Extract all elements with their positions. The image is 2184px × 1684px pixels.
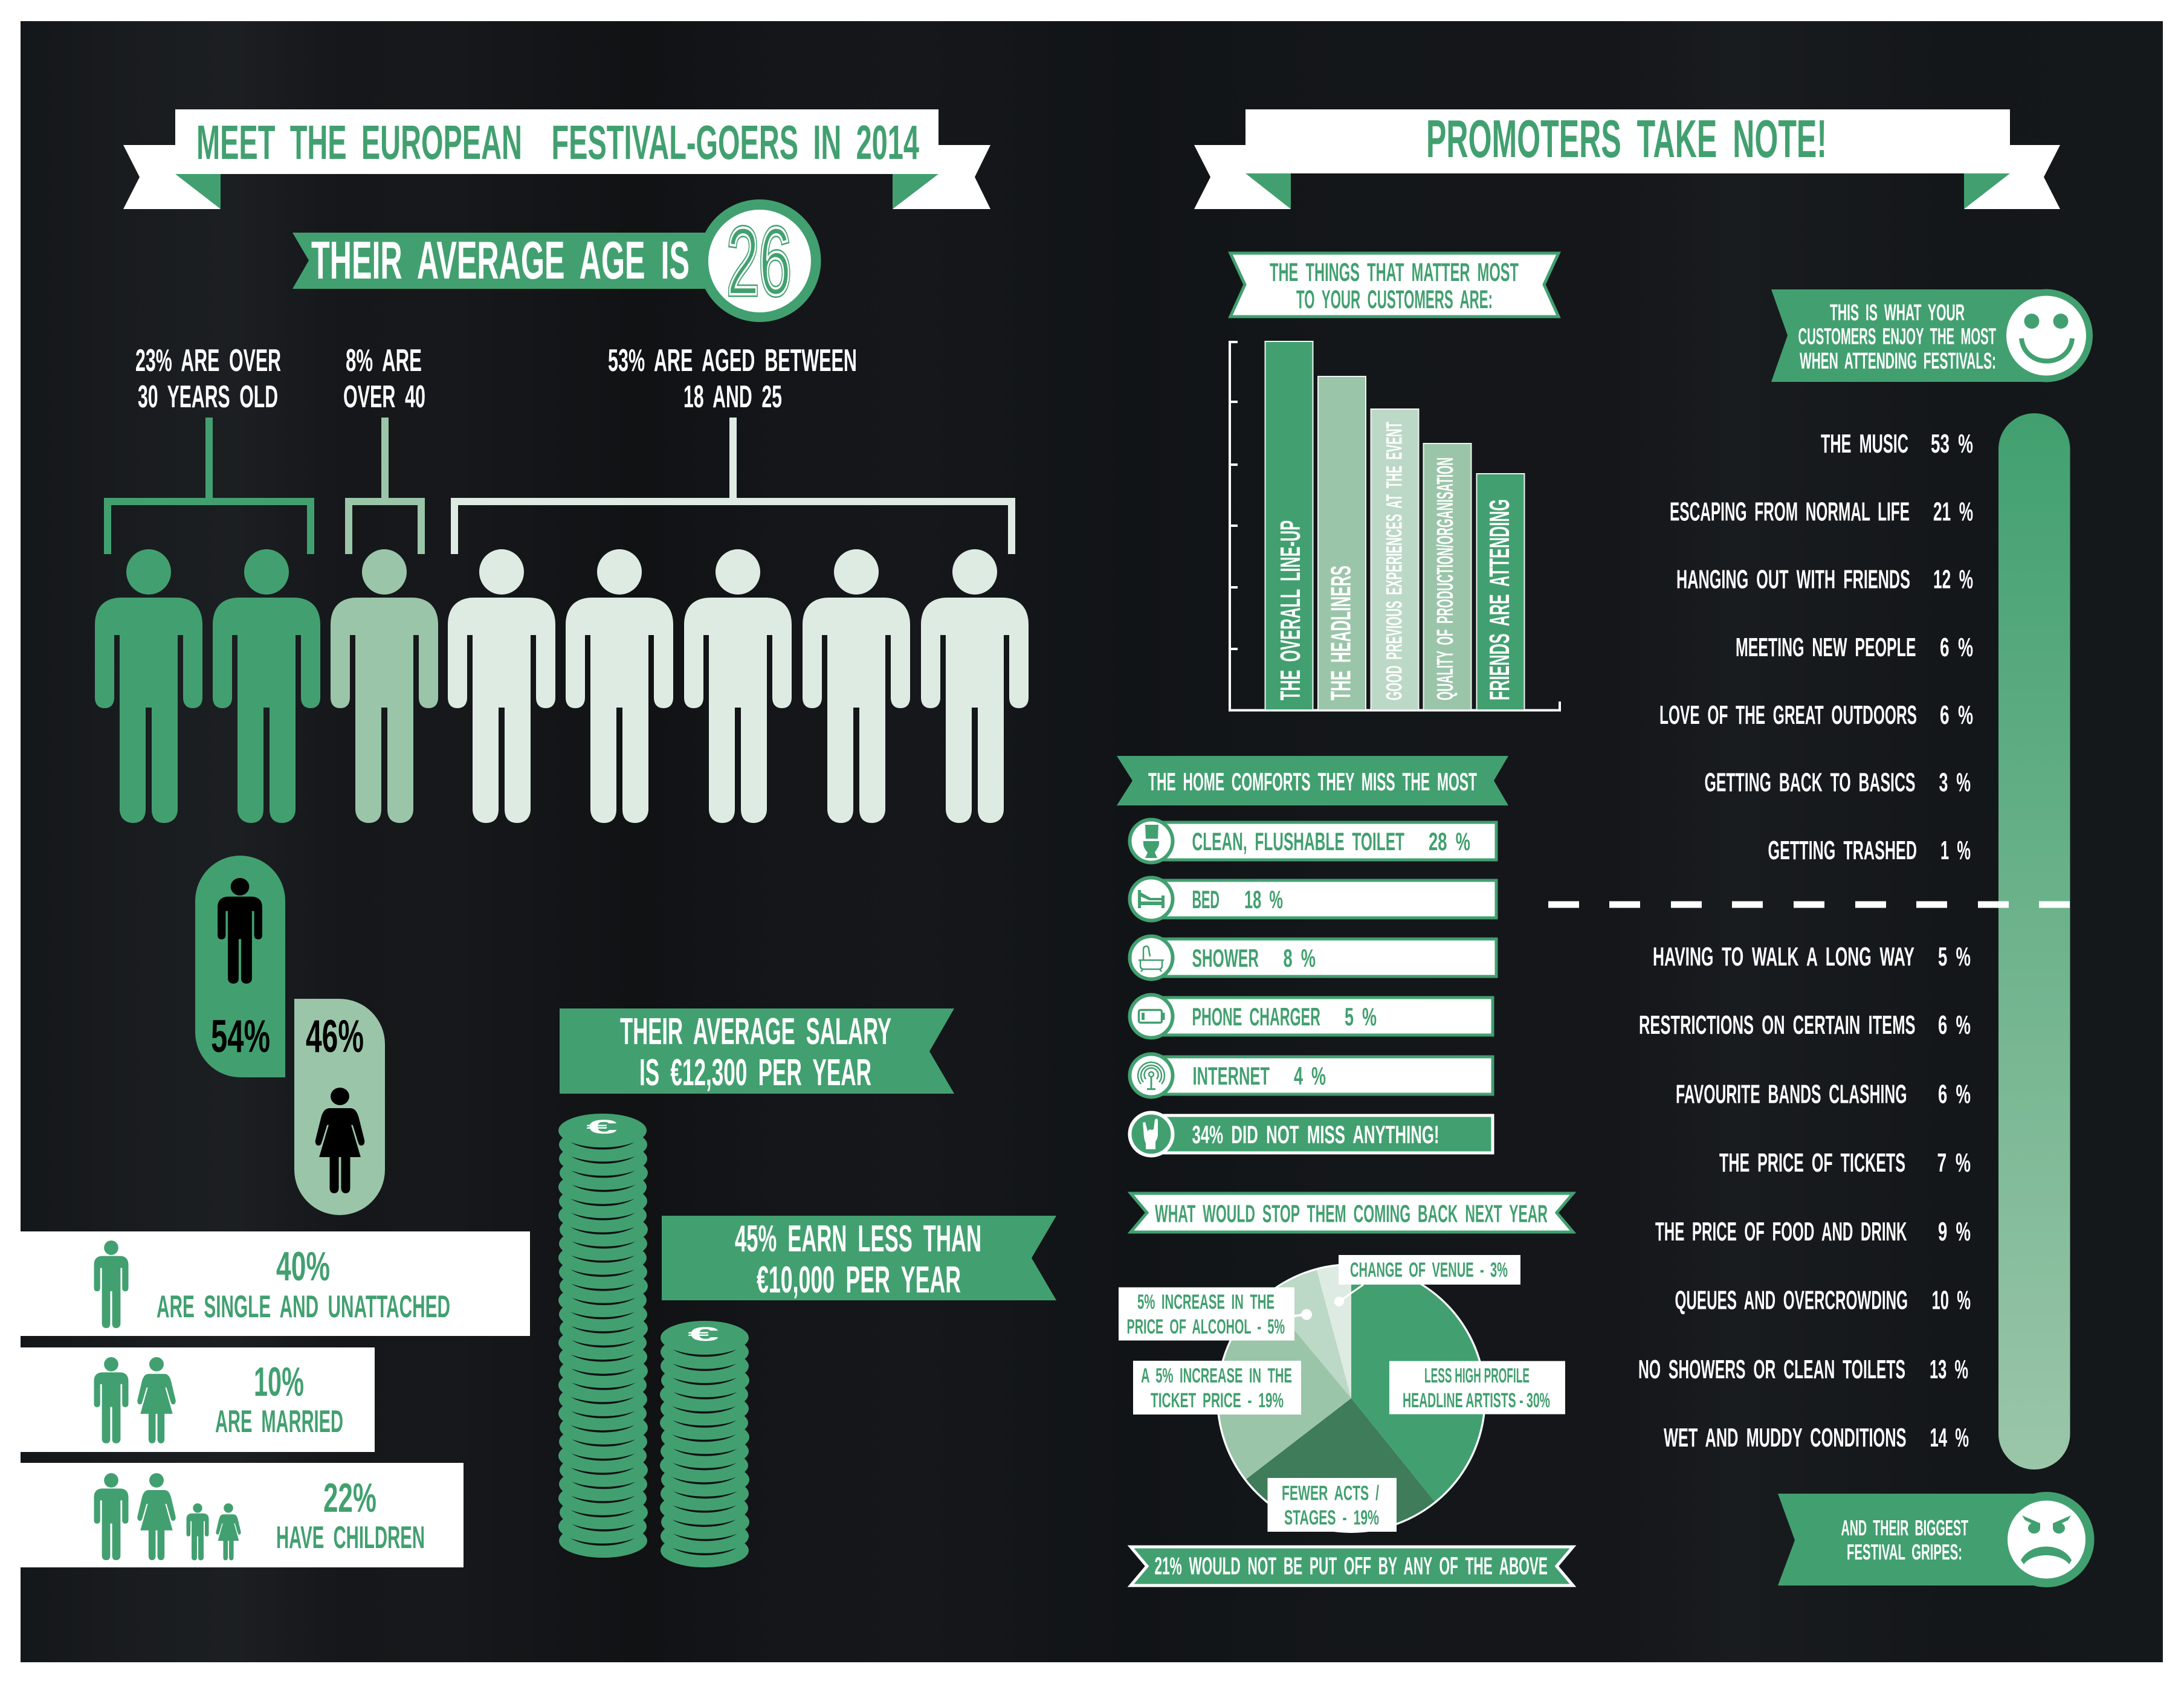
- row: phone charger: PHONE CHARGER: [1192, 1002, 1320, 1031]
- ribbon: home comforts: [1117, 756, 1508, 805]
- title ribbon: promoters take note: PROMOTERS TAKE NOTE!: [1426, 109, 1827, 169]
- list: biggest gripes: QUEUES AND OVERCROWDING: [1675, 1286, 1908, 1315]
- coin stack: tall: [558, 1114, 648, 1560]
- bar: good previous experiences: [1371, 409, 1419, 710]
- row: shower: [1130, 937, 1496, 979]
- list: what customers enjoy: 6 %: [1940, 633, 1973, 662]
- row: did not miss anything: [1130, 1113, 1493, 1155]
- list: what customers enjoy: MEETING NEW PEOPLE: [1736, 633, 1916, 662]
- row: phone charger: 5 %: [1345, 1002, 1377, 1031]
- icon: smiley face: [2006, 296, 2086, 376]
- ribbon: things that matter most: [1230, 253, 1559, 317]
- panel: 10% married: 10%: [254, 1359, 304, 1405]
- callout connector: alcohol: [1294, 1314, 1307, 1316]
- row: toilet: CLEAN, FLUSHABLE TOILET: [1192, 827, 1404, 856]
- age label: 53% aged 18 to 25: [608, 343, 857, 415]
- callout connector: venue: [1339, 1285, 1363, 1302]
- coin stack: tall: €: [586, 1116, 618, 1138]
- ribbon: what would stop them: WHAT WOULD STOP THEM COMING BACK NEXT YEAR: [1155, 1200, 1548, 1228]
- pie label: alcohol price: [1119, 1287, 1294, 1340]
- pie label: headline artists: LESS HIGH PROFILE: [1424, 1364, 1530, 1387]
- ribbon: 21% not put off: 21% WOULD NOT BE PUT OFF BY ANY OF THE ABOVE: [1154, 1552, 1548, 1579]
- list: what customers enjoy: LOVE OF THE GREAT OUTDOORS: [1659, 700, 1917, 730]
- list: biggest gripes: [1638, 942, 1971, 1453]
- list: what customers enjoy: 6 %: [1940, 700, 1973, 730]
- row: shower: 8 %: [1284, 944, 1316, 972]
- list: biggest gripes: 10 %: [1931, 1286, 1971, 1315]
- list: what customers enjoy: GETTING TRASHED: [1768, 836, 1917, 865]
- bar: good previous experiences: GOOD PREVIOUS EXPERIENCES AT THE EVENT: [1381, 422, 1407, 700]
- list: biggest gripes: NO SHOWERS OR CLEAN TOILETS: [1638, 1355, 1905, 1384]
- pie label: ticket price: TICKET PRICE - 19%: [1151, 1389, 1284, 1412]
- list: biggest gripes: 13 %: [1930, 1355, 1968, 1384]
- row: phone charger: [1130, 995, 1493, 1038]
- list: what customers enjoy: 21 %: [1933, 497, 1973, 527]
- list: what customers enjoy: THE MUSIC: [1821, 429, 1908, 459]
- icon: wifi mast: [1138, 1062, 1165, 1089]
- list: biggest gripes: RESTRICTIONS ON CERTAIN ITEMS: [1639, 1010, 1916, 1040]
- row: bed: 18 %: [1244, 885, 1283, 914]
- gradient scale bar: [1998, 413, 2070, 1469]
- coin stack: short: [660, 1321, 749, 1570]
- bracket: over 40: [349, 418, 421, 554]
- list: biggest gripes: HAVING TO WALK A LONG WAY: [1653, 942, 1914, 972]
- dashed divider: [1548, 902, 2070, 908]
- callout dot: venue: [1334, 1297, 1344, 1306]
- pie label: alcohol price: PRICE OF ALCOHOL - 5%: [1126, 1315, 1285, 1338]
- bar: friends attending: FRIENDS ARE ATTENDING: [1484, 499, 1515, 700]
- row: bed: BED: [1192, 885, 1220, 914]
- average age ribbon and badge: 26: [727, 208, 791, 315]
- list: what customers enjoy: 53 %: [1931, 429, 1973, 459]
- title ribbon: promoters take note: [1194, 109, 2060, 209]
- ribbon: what customers enjoy with smiley: CUSTOMERS ENJOY THE MOST: [1798, 324, 1996, 349]
- row: internet: INTERNET: [1193, 1062, 1270, 1090]
- age label: 8% over 40: OVER 40: [343, 379, 425, 415]
- pie label: fewer acts: FEWER ACTS /: [1282, 1482, 1379, 1505]
- panel: 22% have children: [21, 1463, 464, 1567]
- row: internet: 4 %: [1294, 1062, 1326, 1090]
- icon: rock hand: [1143, 1118, 1158, 1149]
- pie label: fewer acts: [1268, 1478, 1397, 1532]
- gender pill: 46% female: [294, 999, 385, 1215]
- row: did not miss anything: 34% DID NOT MISS ANYTHING!: [1192, 1120, 1439, 1149]
- icon: battery: [1139, 1010, 1165, 1022]
- bracket: over 30: [108, 418, 311, 554]
- age label: 23% over 30: 30 YEARS OLD: [138, 379, 278, 415]
- gender pill: 46% female: 46%: [306, 1011, 364, 1062]
- salary ribbon: average salary: THEIR AVERAGE SALARY: [620, 1011, 891, 1053]
- list: biggest gripes: 9 %: [1938, 1217, 1971, 1247]
- coin stack: short: €: [688, 1323, 720, 1345]
- row of eight people figures: [95, 549, 1029, 823]
- list: biggest gripes: WET AND MUDDY CONDITIONS: [1664, 1423, 1906, 1453]
- panel: 22% have children: 22%: [323, 1475, 376, 1521]
- ribbon: things that matter most: THE THINGS THAT MATTER MOST: [1270, 258, 1519, 287]
- ribbon: biggest gripes with angry face: AND THEIR BIGGEST: [1841, 1515, 1968, 1540]
- average age ribbon and badge: 26: [727, 208, 791, 315]
- gender pill: 54% male: 54%: [211, 1011, 270, 1062]
- pie label: headline artists: HEADLINE ARTISTS - 30%: [1403, 1389, 1550, 1412]
- ribbon: things that matter most: TO YOUR CUSTOMERS ARE:: [1296, 285, 1493, 314]
- row: bed: [1130, 877, 1496, 921]
- panel: 40% single: 40%: [276, 1244, 330, 1289]
- list: what customers enjoy: GETTING BACK TO BASICS: [1704, 767, 1916, 798]
- pie label: ticket price: [1133, 1361, 1301, 1415]
- list: biggest gripes: 6 %: [1938, 1079, 1971, 1109]
- bar: quality of production: QUALITY OF PRODUCTION/ORGANISATION: [1433, 457, 1458, 700]
- ribbon: what would stop them: [1131, 1193, 1573, 1232]
- list: biggest gripes: 7 %: [1937, 1148, 1971, 1178]
- row: internet: [1130, 1054, 1493, 1097]
- ribbon: biggest gripes with angry face: FESTIVAL GRIPES:: [1847, 1540, 1962, 1564]
- title ribbon: meet the European festival-goers: MEET THE EUROPEAN FESTIVAL-GOERS IN 2014: [196, 115, 919, 169]
- salary ribbon: average salary: IS €12,300 PER YEAR: [639, 1052, 871, 1094]
- icon: bed: [1138, 890, 1165, 908]
- ribbon: biggest gripes with angry face: [1778, 1492, 2095, 1587]
- pie label: change of venue: [1339, 1255, 1520, 1285]
- list: what customers enjoy: 12 %: [1933, 564, 1973, 595]
- ribbon: home comforts: THE HOME COMFORTS THEY MISS THE MOST: [1148, 767, 1477, 796]
- average age ribbon and badge: [292, 199, 821, 322]
- row: shower: SHOWER: [1192, 944, 1259, 972]
- salary ribbon: 45% earn less: [662, 1216, 1056, 1301]
- salary ribbon: average salary: [560, 1008, 954, 1094]
- bar: overall line-up: [1265, 341, 1313, 710]
- ribbon: what customers enjoy with smiley: THIS IS WHAT YOUR: [1830, 300, 1965, 326]
- bar: quality of production: [1424, 444, 1471, 710]
- list: what customers enjoy: 3 %: [1939, 767, 1971, 798]
- bar: headliners: THE HEADLINERS: [1325, 566, 1356, 700]
- list: biggest gripes: THE PRICE OF TICKETS: [1719, 1148, 1905, 1178]
- bracket: aged 18 to 25: [454, 418, 1012, 554]
- icon: bath: [1139, 946, 1164, 972]
- list: what customers enjoy: HANGING OUT WITH FRIENDS: [1676, 564, 1910, 595]
- bar: overall line-up: THE OVERALL LINE-UP: [1275, 520, 1306, 700]
- icon: toilet: [1143, 825, 1159, 858]
- panel: 40% single: [21, 1231, 530, 1336]
- ribbon: what customers enjoy with smiley: WHEN ATTENDING FESTIVALS:: [1800, 349, 1996, 374]
- age label: 53% aged 18 to 25: 18 AND 25: [683, 379, 782, 415]
- chart axes: [1230, 342, 1560, 711]
- gender pill: 54% male: [195, 856, 285, 1077]
- list: biggest gripes: 14 %: [1930, 1423, 1969, 1453]
- panel: 22% have children: HAVE CHILDREN: [276, 1520, 425, 1555]
- bar: headliners: [1318, 376, 1366, 710]
- list: what customers enjoy: ESCAPING FROM NORMAL LIFE: [1670, 497, 1910, 527]
- salary ribbon: 45% earn less: 45% EARN LESS THAN: [735, 1218, 981, 1260]
- panel: 10% married: [21, 1347, 375, 1452]
- age label: 8% over 40: [343, 343, 425, 415]
- title ribbon: meet the European festival-goers: [123, 109, 990, 209]
- pie label: ticket price: A 5% INCREASE IN THE: [1141, 1364, 1292, 1387]
- ribbon: 21% not put off: [1131, 1547, 1573, 1586]
- pie label: alcohol price: 5% INCREASE IN THE: [1137, 1291, 1275, 1314]
- panel: 40% single: ARE SINGLE AND UNATTACHED: [157, 1289, 450, 1324]
- age label: 8% over 40: 8% ARE: [346, 343, 422, 378]
- list: biggest gripes: 5 %: [1938, 942, 1971, 972]
- bar chart: what matters most: [1230, 341, 1560, 711]
- age label: 53% aged 18 to 25: 53% ARE AGED BETWEEN: [608, 343, 857, 378]
- list: biggest gripes: THE PRICE OF FOOD AND DRINK: [1655, 1217, 1907, 1247]
- average age ribbon and badge: THEIR AVERAGE AGE IS: [311, 230, 690, 290]
- pie label: change of venue: CHANGE OF VENUE - 3%: [1350, 1259, 1508, 1282]
- list: biggest gripes: 6 %: [1938, 1010, 1971, 1040]
- list: what customers enjoy: 1 %: [1940, 836, 1971, 865]
- pie label: fewer acts: STAGES - 19%: [1284, 1506, 1379, 1529]
- row: toilet: 28 %: [1429, 827, 1470, 856]
- age label: 23% over 30: 23% ARE OVER: [135, 343, 281, 378]
- list: what customers enjoy: [1659, 429, 1973, 865]
- icon: angry face: [2008, 1501, 2085, 1578]
- callout dot: alcohol: [1301, 1309, 1312, 1320]
- row: toilet: [1130, 819, 1496, 863]
- salary ribbon: 45% earn less: €10,000 PER YEAR: [757, 1259, 961, 1301]
- bar: friends attending: [1477, 474, 1524, 710]
- pie label: headline artists: [1389, 1361, 1565, 1414]
- age label: 23% over 30: [135, 343, 281, 415]
- list: biggest gripes: FAVOURITE BANDS CLASHING: [1676, 1079, 1907, 1109]
- panel: 10% married: ARE MARRIED: [215, 1404, 343, 1439]
- pie chart: reasons not to return: [1216, 1263, 1486, 1533]
- ribbon: what customers enjoy with smiley: [1771, 289, 2093, 382]
